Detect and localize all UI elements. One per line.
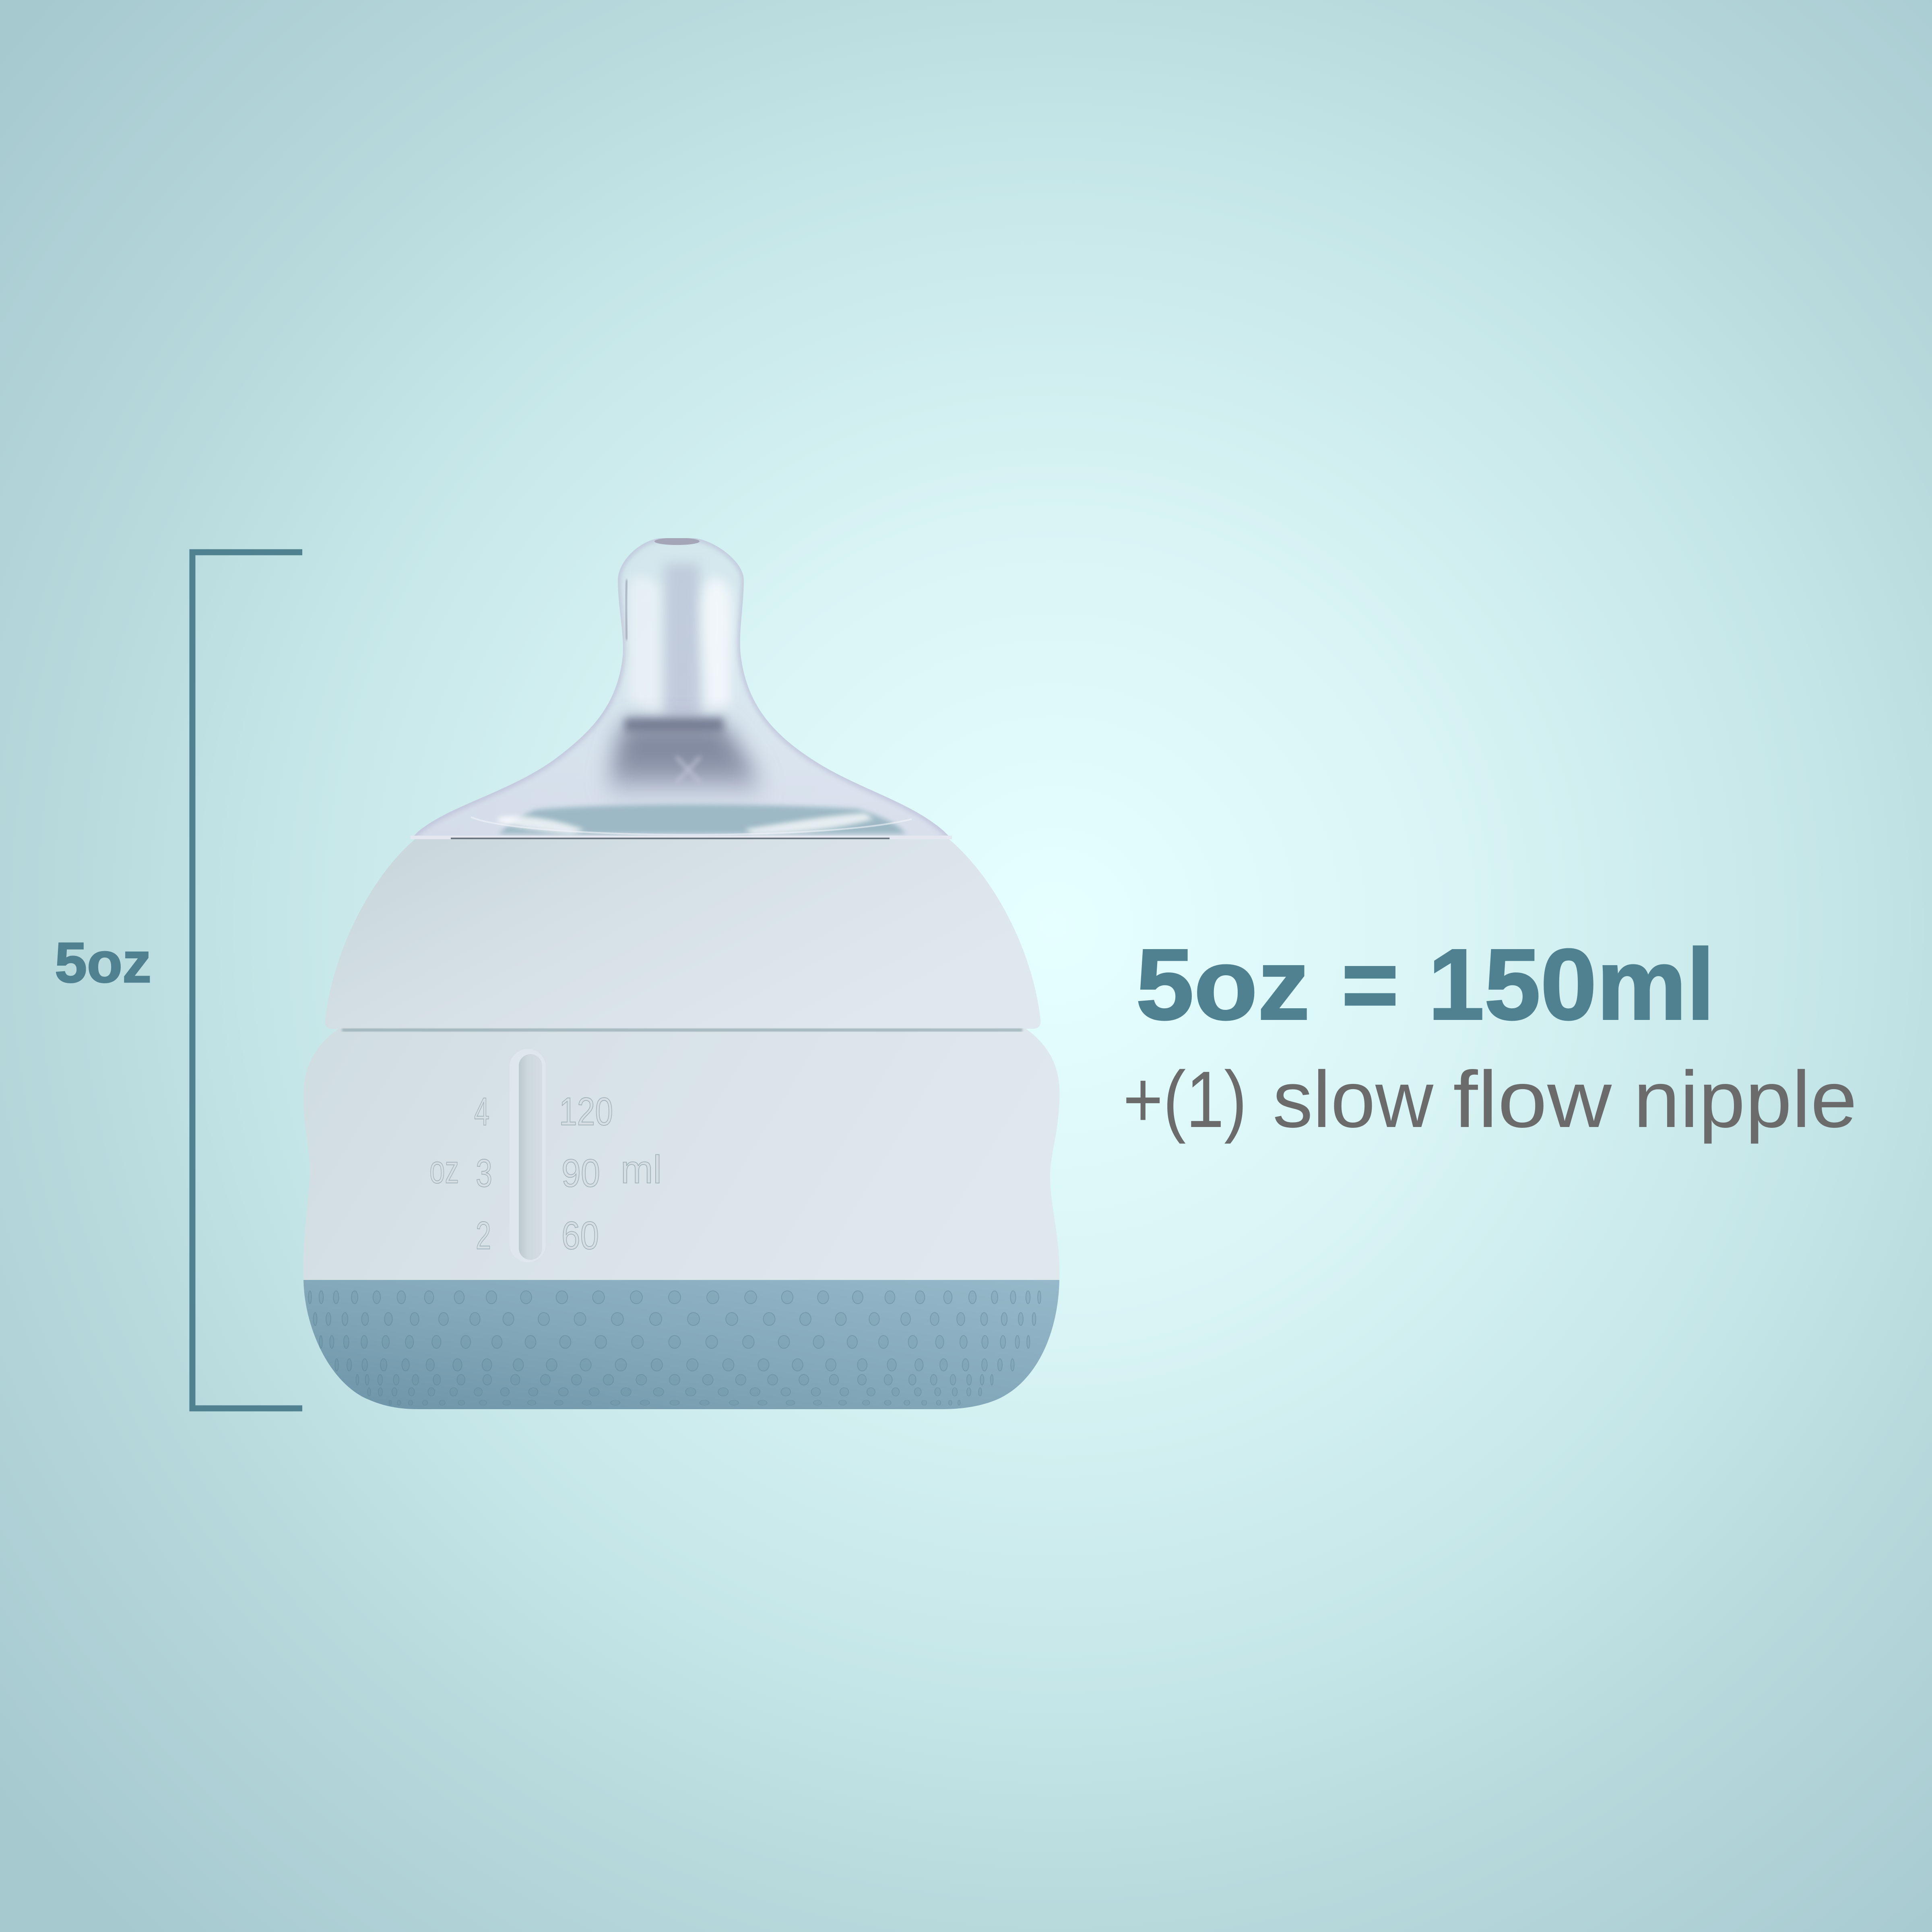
subheading: included nipple: +(1) (1123, 1055, 1247, 1144)
heading: capacity: 150ml (1428, 928, 1715, 1040)
capacity bracket (192, 552, 302, 1408)
heading: capacity (1136, 928, 1715, 1040)
silicone base with dots (303, 1280, 1059, 1409)
baby bottle (303, 538, 1059, 1409)
volume markings: 4 (474, 1090, 489, 1133)
volume markings: 60 (561, 1214, 599, 1257)
collar cap (325, 839, 1040, 1031)
bottle body (303, 1027, 1059, 1280)
fill window slot (510, 1049, 546, 1262)
volume markings: 120 (559, 1090, 613, 1133)
silicone nipple (411, 538, 952, 839)
subheading: included nipple: flow (1453, 1055, 1612, 1144)
subheading: included nipple: slow (1273, 1055, 1434, 1144)
volume markings: 90 (561, 1151, 600, 1195)
heading: capacity: 5oz (1136, 928, 1310, 1040)
volume markings: 2 (476, 1214, 491, 1257)
volume markings (429, 1090, 662, 1257)
volume markings: ml (621, 1148, 662, 1191)
volume markings: 3 (476, 1151, 492, 1195)
subheading: included nipple: nipple (1633, 1055, 1857, 1144)
heading: capacity: = (1342, 928, 1399, 1040)
bracket label: 5oz: 5oz (55, 931, 151, 994)
volume markings: oz (429, 1148, 459, 1191)
subheading: included nipple (1123, 1055, 1857, 1144)
